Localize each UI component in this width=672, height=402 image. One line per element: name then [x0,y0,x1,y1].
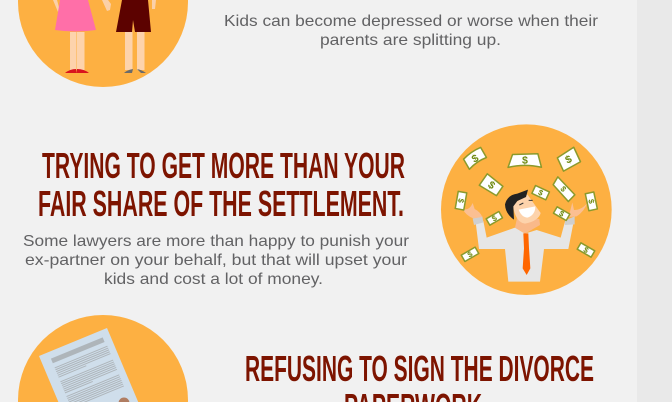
text block: kids become depressed: Kids can become depressed or worse when their [224,13,599,30]
heading: trying to get more: TRYING TO GET MORE THAN YOUR [42,145,405,186]
text block: lawyers: kids and cost a lot of money. [104,271,323,288]
bill 11 [461,247,479,262]
text block: kids become depressed: parents are splitting up. [320,32,501,49]
bill 9: $ [490,213,499,223]
bill 3: $ [563,153,574,167]
bill 9 [486,211,503,226]
text block: lawyers: ex-partner on your behalf, but that will upset your [25,252,408,269]
icon: couple holding hands [18,0,188,87]
icon: man throwing money [441,124,612,295]
bill 1: $ [470,152,481,166]
bill 10: $ [557,209,566,219]
heading: trying to get more: FAIR SHARE OF THE SETTLEMENT. [38,183,404,224]
bill 7 [455,191,467,210]
bill 2: $ [522,155,528,167]
bill 12: $ [582,245,591,255]
icon: divorce document [18,315,188,402]
bill 5 [551,176,575,202]
bill 2 [508,153,542,169]
bill 5: $ [558,184,568,194]
bill 4: $ [485,179,497,192]
heading: refusing to sign [245,348,594,402]
bill 8: $ [586,198,596,205]
bill 6: $ [537,188,545,198]
heading: trying to get more [38,145,405,224]
text block: lawyers: Some lawyers are more than happy to punish your [23,233,410,250]
text block: kids become depressed [224,13,599,49]
bill 1 [463,147,487,169]
bill 10 [553,206,570,221]
bill 11: $ [466,249,475,259]
bill 8 [585,192,597,211]
bill 4 [479,174,504,197]
bill 12 [577,242,595,258]
text block: lawyers [23,233,410,288]
bill 3 [556,147,581,171]
bill 7: $ [456,198,466,204]
bill 6 [532,185,549,200]
